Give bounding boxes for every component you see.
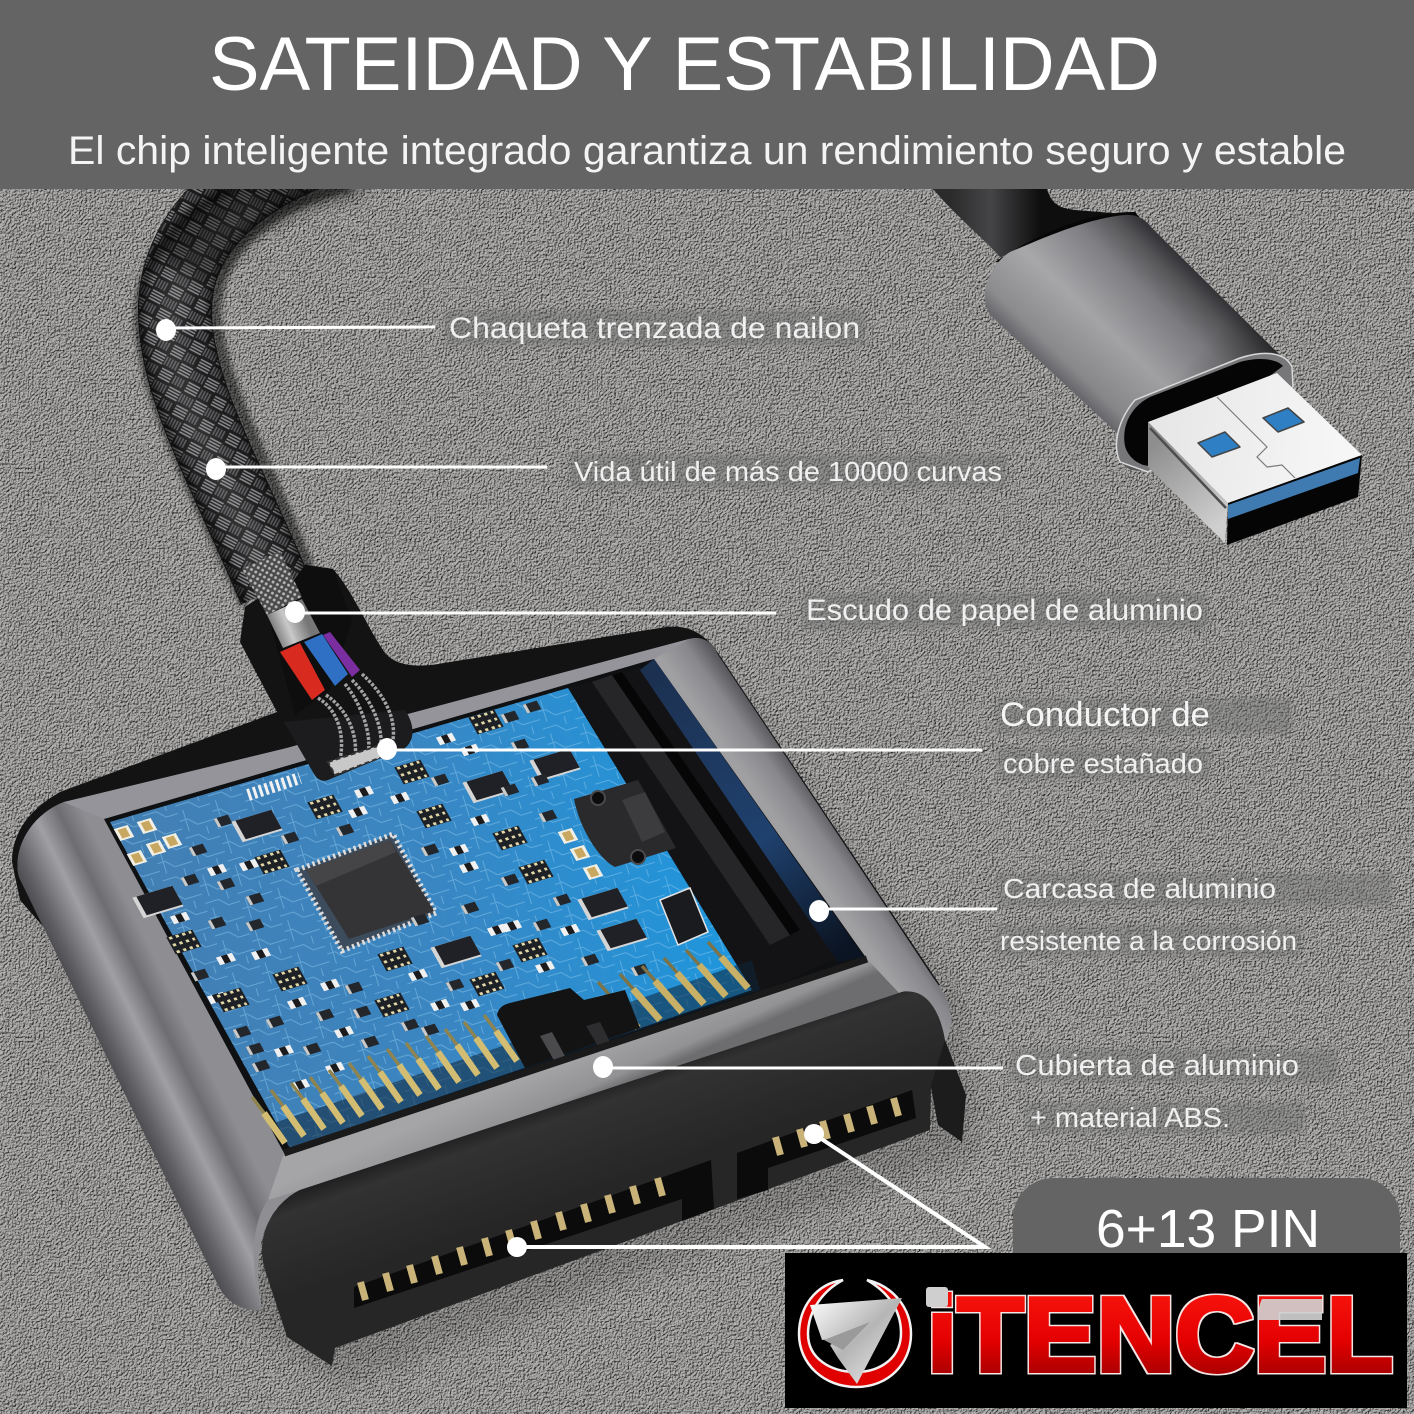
- foil braid shield: [242, 551, 302, 615]
- 6 pin slot: [737, 1090, 916, 1199]
- blue wire: [304, 634, 348, 686]
- callout: aluminium cover: [593, 1056, 1003, 1078]
- usb blue insert: [1228, 458, 1360, 519]
- callout: pin connectors: [507, 1124, 985, 1257]
- connector right tab: [931, 1040, 966, 1142]
- aluminium shell: [18, 638, 951, 1310]
- label: Conductor de cobre estañado: cobre estañado: [1003, 748, 1203, 779]
- tinned copper strands: [318, 674, 393, 760]
- 6 gold contacts: [776, 1098, 898, 1155]
- gold header pins front left: [252, 1015, 517, 1143]
- usb mouth: [1227, 455, 1362, 545]
- label: Chaqueta trenzada de nailon: Chaqueta trenzada de nailon: [449, 312, 860, 345]
- illustration: USB 3.0 plug: [933, 189, 1362, 545]
- black board clip: [497, 988, 640, 1068]
- cable boot opening: [268, 565, 352, 715]
- label: Carcasa de aluminio: Carcasa de aluminio: [1003, 873, 1276, 904]
- callout: bend life: [206, 458, 547, 480]
- usb collar: [995, 212, 1140, 262]
- label: Carcasa de aluminio: [996, 873, 1393, 957]
- usb cable: [933, 189, 1137, 257]
- window front dark lip: [284, 959, 867, 1153]
- label: Vida útil: Vida útil de más de 10000 curvas: [574, 456, 1002, 487]
- usb housing lip: [1116, 353, 1293, 472]
- callout: nylon jacket: [156, 319, 435, 341]
- callout lines and dots: [156, 319, 1003, 1257]
- iTENCEL logo: [785, 1253, 1407, 1408]
- pin count badge: 6+13 PIN: [1096, 1199, 1320, 1259]
- main processor chip: [297, 834, 436, 951]
- navy inner wall: [640, 659, 864, 962]
- subtitle: El chip inteligente integrado garantiza un rendimiento seguro y estable: [68, 129, 1346, 173]
- open window recess: [104, 659, 867, 1153]
- black rubber housing rim: [12, 565, 940, 1200]
- black SATA connector: [262, 991, 966, 1366]
- usb tongue side: [1148, 422, 1228, 543]
- shell right curved side: [654, 638, 951, 1046]
- illustration: SATA adapter: [12, 135, 980, 1385]
- usb opening: [1124, 359, 1283, 466]
- label: Conductor de cobre estañado: [996, 696, 1292, 780]
- label: Cubierta de aluminio: Cubierta de aluminio: [1015, 1050, 1299, 1082]
- shell top strip: [64, 639, 689, 819]
- dark heat channel: [568, 659, 864, 996]
- callout: aluminium case: [809, 900, 997, 922]
- 13 pin slot: [354, 1160, 714, 1308]
- usb blue hole right: [1263, 408, 1304, 432]
- purple wire: [323, 632, 360, 677]
- callout: tinned copper: [377, 738, 982, 760]
- nylon braided cable: [139, 135, 370, 605]
- label: Escudo de papel de aluminio: Escudo de papel de aluminio: [806, 594, 1203, 627]
- usb seam line: [1217, 397, 1295, 478]
- gold header pins front right: [598, 942, 748, 1028]
- circuit board: [110, 688, 867, 1153]
- label: Cubierta de aluminio: + material ABS.: [1030, 1102, 1230, 1133]
- dark band behind header pins: [268, 960, 760, 1148]
- adapter drop shadow: [30, 640, 980, 1385]
- red wire: [280, 643, 325, 700]
- header band: [0, 0, 1414, 189]
- label: Carcasa de aluminio: resistente a la corrosión: [1000, 926, 1297, 956]
- board top left comb: [248, 778, 300, 795]
- label: Cubierta de aluminio: [1011, 1049, 1336, 1134]
- socket block with screws: [574, 780, 676, 867]
- aluminium foil band: [267, 599, 320, 648]
- callout: foil shield: [285, 601, 776, 623]
- board components: [114, 701, 708, 1091]
- usb tongue top plate: [1148, 373, 1362, 503]
- logo wordmark: iTENCEL: [927, 1276, 1393, 1394]
- logo silver accents: [926, 1287, 1322, 1320]
- logo emblem: [799, 1280, 911, 1387]
- pin count badge: [1013, 1178, 1400, 1298]
- label: Conductor de cobre estañado: Conductor de: [1000, 696, 1210, 734]
- black clamp block: [284, 710, 412, 781]
- title: SATEIDAD Y ESTABILIDAD: [209, 22, 1160, 107]
- usb blue hole left: [1198, 432, 1240, 457]
- shell left curved side: [18, 802, 284, 1310]
- 13 gold contacts: [360, 1178, 662, 1300]
- usb metal housing: [985, 215, 1293, 471]
- shell front strip: [268, 959, 899, 1200]
- solder pads: [328, 742, 395, 775]
